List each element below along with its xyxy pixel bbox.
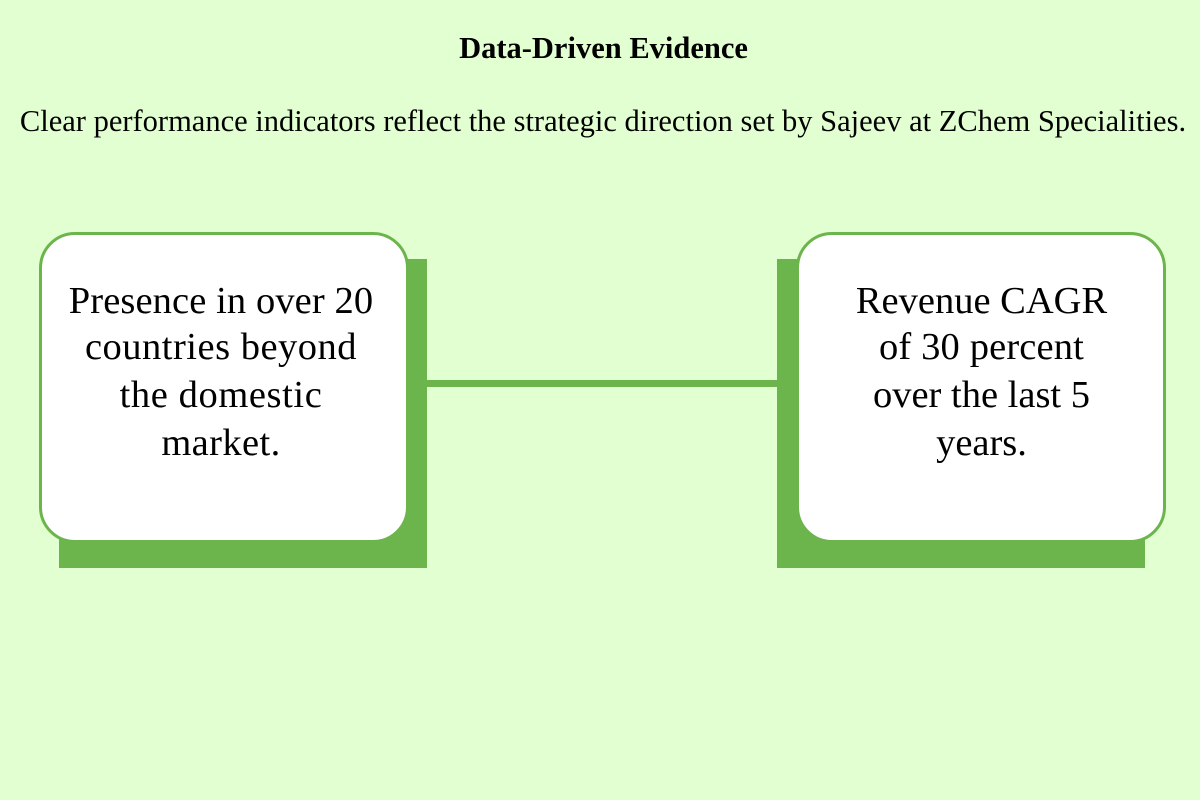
text: revenue: years. [936,422,1027,464]
text: revenue: Revenue CAGR [856,280,1107,322]
subtitle: Clear performance indicators reflect the strategic direction set by Sajeev at ZChem Specialities. [20,104,1186,138]
panel: left card shadow [59,259,427,568]
text: presence: Presence in over 20 [69,280,373,322]
text: revenue: over the last 5 [873,374,1090,416]
title: Data-Driven Evidence [459,31,748,65]
panel: revenue card [796,232,1166,543]
text: revenue [856,280,1108,464]
text: presence: market. [161,422,281,464]
text: presence [69,280,373,464]
text: presence: countries beyond [85,326,357,368]
connector line [420,380,785,387]
text: revenue: of 30 percent [879,326,1084,368]
panel: presence card [39,232,409,543]
text: presence: the domestic [120,374,322,416]
panel: right card shadow [777,259,1145,568]
